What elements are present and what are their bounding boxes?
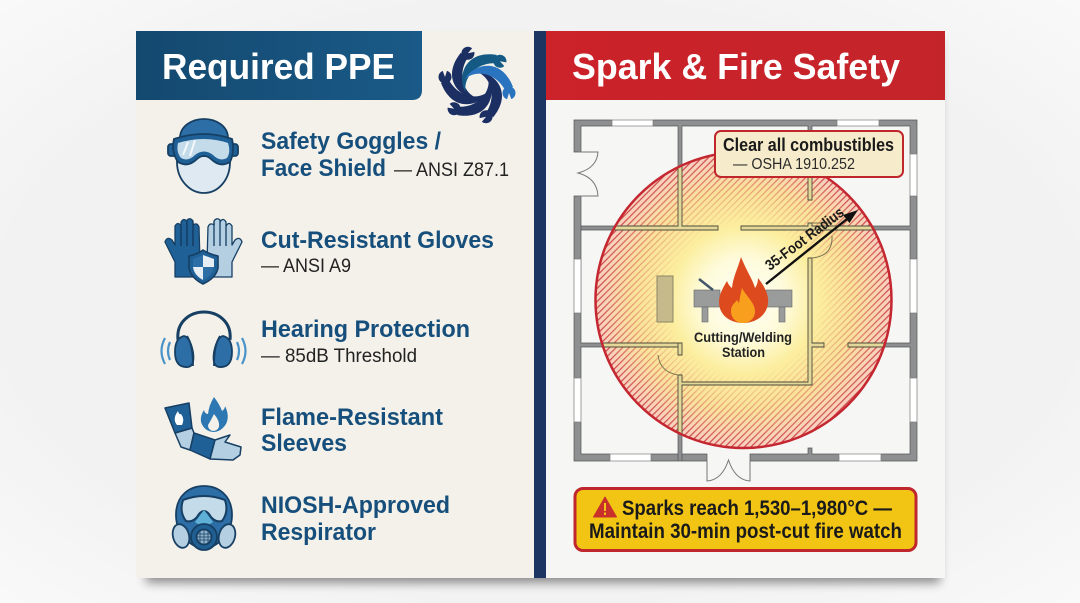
text: gloves: — ANSI A9	[261, 256, 351, 277]
text: hearing: — 85dB Threshold	[261, 346, 417, 367]
text: gloves: Cut-Resistant Gloves	[261, 227, 494, 254]
text: flame sleeves	[261, 404, 443, 457]
icon: warning triangle	[594, 497, 616, 517]
warning text: Maintain 30-min post-cut fire watch	[589, 520, 902, 543]
label: station	[694, 329, 792, 360]
icon: ear defenders	[162, 312, 246, 367]
text: respirator: Respirator	[261, 519, 376, 546]
text: goggles	[261, 128, 509, 182]
text: gloves	[261, 227, 494, 277]
icon: flame	[719, 257, 768, 323]
text: hearing	[261, 316, 470, 367]
text: goggles: Safety Goggles /	[261, 128, 441, 155]
warning text	[589, 497, 902, 543]
item: hearing protection	[162, 312, 470, 367]
icon: goggles and face shield	[168, 119, 238, 193]
text: goggles: — ANSI Z87.1	[394, 160, 509, 181]
arrow: 35-foot radius: 35-Foot Radius	[762, 204, 847, 274]
text: flame sleeves: Sleeves	[261, 430, 347, 457]
item: flame-resistant sleeves	[165, 397, 443, 460]
icon: respirator mask	[170, 486, 238, 550]
item: gloves	[165, 219, 494, 284]
icon: gloves with shield	[165, 219, 242, 284]
callout: clear combustibles: — OSHA 1910.252	[733, 156, 855, 173]
callout: clear combustibles	[715, 131, 903, 177]
text: respirator: NIOSH-Approved	[261, 492, 450, 519]
table	[694, 290, 792, 322]
hazard zone: 35-foot circle	[594, 154, 893, 450]
panel: divider	[534, 31, 546, 578]
floor plan	[574, 120, 917, 481]
label: station: Cutting/Welding	[694, 329, 792, 345]
heading: Spark & Fire Safety	[546, 31, 945, 100]
item: respirator	[170, 486, 450, 550]
callout: clear combustibles: Clear all combustibles	[723, 135, 894, 155]
label: station: Station	[722, 344, 765, 360]
warning text: Sparks reach 1,530–1,980°C —	[622, 497, 892, 520]
panel: spark and fire safety	[546, 31, 945, 578]
heading: Required PPE	[136, 31, 422, 100]
heading: Required PPE: Required PPE	[162, 46, 395, 87]
text: respirator	[261, 492, 450, 546]
item: goggles and face shield	[168, 119, 509, 193]
icon: swirl wrench logo	[438, 42, 516, 128]
heading: Spark & Fire Safety: Spark & Fire Safety	[572, 46, 900, 87]
panel: required PPE	[136, 31, 534, 578]
icon: torch	[699, 279, 713, 290]
text: goggles: Face Shield	[261, 155, 386, 182]
text: flame sleeves: Flame-Resistant	[261, 404, 443, 431]
text: hearing: Hearing Protection	[261, 316, 470, 343]
icon: sleeve and flame	[165, 397, 241, 460]
warning box	[575, 488, 916, 550]
cutting/welding station	[657, 257, 792, 360]
material rectangle	[657, 276, 673, 322]
